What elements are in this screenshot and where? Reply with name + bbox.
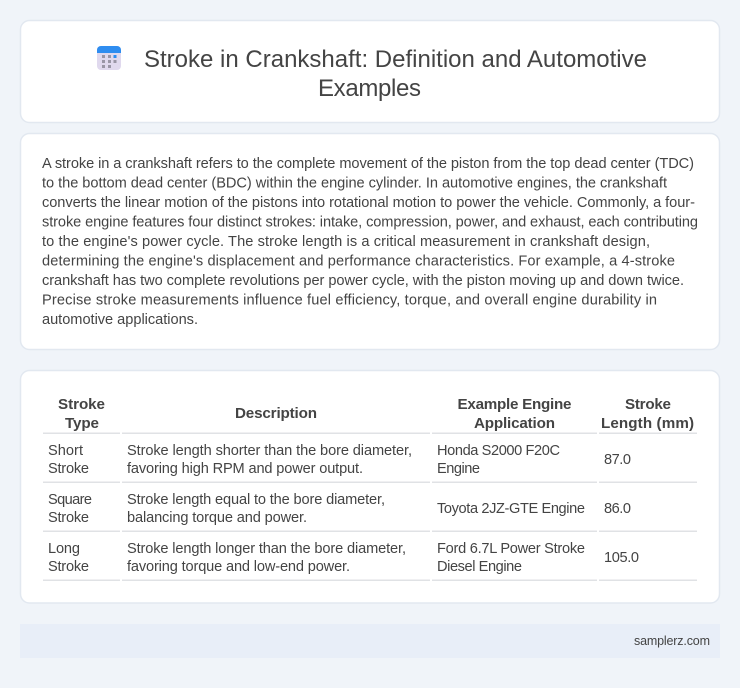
table header: Stroke — [625, 396, 671, 413]
table header: Application — [474, 415, 555, 432]
table header: Stroke — [58, 396, 105, 413]
table row: square stroke — [48, 492, 631, 526]
panel: stroke types table — [20, 370, 720, 603]
table row: long stroke: 105.0 — [604, 550, 639, 566]
table row: short stroke: Stroke length shorter than the bore diameter, — [127, 443, 412, 459]
title: Stroke in Crankshaft: Definition and Automotive — [144, 46, 647, 73]
table row: long stroke — [48, 541, 639, 575]
table header: Example Engine — [458, 396, 572, 413]
table row: square stroke: Stroke — [48, 510, 89, 526]
text block: definition: to the bottom dead center (BDC) within the engine cylinder. In automotive engines, the crankshaft — [42, 176, 667, 192]
text block: definition: converts the linear motion of the pistons into rotational motion to power the vehicle. Commonly, a four- — [42, 195, 695, 211]
icon: calendar — [97, 46, 121, 70]
panel: title card — [20, 20, 720, 122]
table row: short stroke: Short — [48, 443, 83, 459]
table row: short stroke: 87.0 — [604, 452, 631, 468]
table header: Description — [235, 405, 317, 422]
text block: definition: Precise stroke measurements influence fuel efficiency, torque, and overall engine durability in — [42, 292, 657, 308]
table row: square stroke: balancing torque and power. — [127, 510, 307, 526]
text block: definition: to the engine's power cycle. The stroke length is a critical measurement in crankshaft design, — [42, 234, 650, 250]
table row: short stroke: Engine — [437, 461, 480, 477]
table row: long stroke: Ford 6.7L Power Stroke — [437, 541, 585, 557]
table row: short stroke: Honda S2000 F20C — [437, 443, 560, 459]
table row: square stroke: 86.0 — [604, 501, 631, 517]
table row: square stroke: Stroke length equal to the bore diameter, — [127, 492, 385, 508]
table row: long stroke: Stroke — [48, 559, 89, 575]
text block: definition: A stroke in a crankshaft refers to the complete movement of the piston from the top dead center (TDC) — [42, 156, 694, 172]
table row: long stroke: Stroke length longer than the bore diameter, — [127, 541, 406, 557]
title — [144, 46, 647, 102]
table row: square stroke: Square — [48, 492, 92, 508]
title: Examples — [318, 75, 421, 102]
table header — [58, 396, 694, 432]
table row: long stroke: favoring torque and low-end power. — [127, 559, 350, 575]
text block: definition: stroke engine features four distinct strokes: intake, compression, power, and exhaust, each contributing — [42, 214, 698, 230]
footer — [20, 624, 720, 658]
footer: samplerz.com — [634, 634, 710, 648]
table row: long stroke: Diesel Engine — [437, 559, 522, 575]
table row: square stroke: Toyota 2JZ-GTE Engine — [437, 501, 585, 517]
text block: definition — [42, 156, 698, 328]
text block: definition: automotive applications. — [42, 312, 198, 328]
text block: definition: crankshaft has two complete revolutions per power cycle, with the piston moving up and down twice. — [42, 273, 684, 289]
panel: definition paragraph — [20, 134, 720, 350]
table row: long stroke: Long — [48, 541, 80, 557]
table header: Type — [65, 415, 99, 432]
table row: short stroke: Stroke — [48, 461, 89, 477]
table row: short stroke: favoring high RPM and power output. — [127, 461, 363, 477]
table row: short stroke — [48, 443, 631, 477]
table header: Length (mm) — [601, 415, 694, 432]
text block: definition: determining the engine's displacement and performance characteristics. For example, a 4-stroke — [42, 254, 675, 270]
